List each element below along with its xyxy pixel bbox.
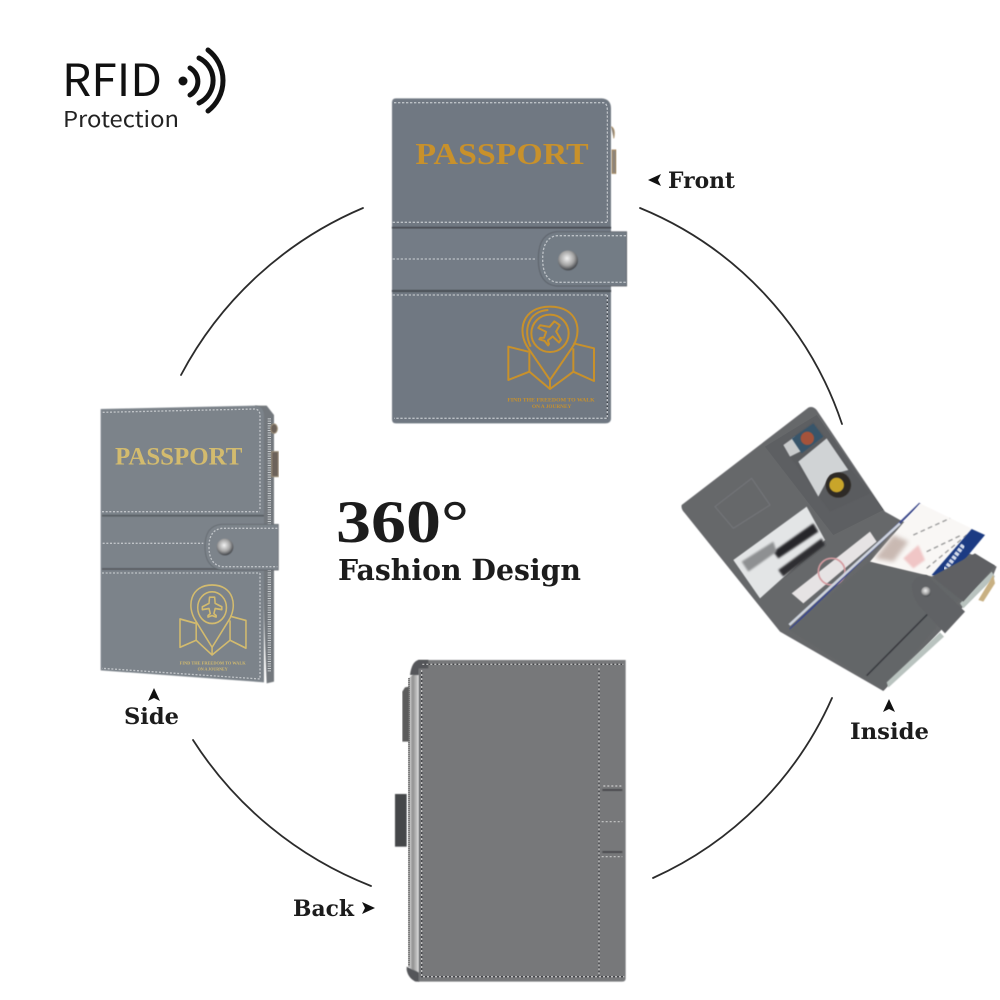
logo: RFID Protection <box>62 45 223 134</box>
strap with snap <box>538 232 627 286</box>
ID card with photo <box>782 422 870 512</box>
PASSPORT foil text: PASSPORT <box>415 137 589 171</box>
zipper pull <box>402 687 409 742</box>
emblem caption: FIND THE FREEDOM TO WALK <box>180 660 246 665</box>
emblem caption: ON A JOURNEY <box>532 405 572 410</box>
cover corners <box>407 660 428 982</box>
interior base and left page <box>681 407 997 691</box>
zipper <box>408 670 418 975</box>
wallet: inside view <box>681 407 997 691</box>
wallet: side view <box>101 406 278 683</box>
label: Back: Back <box>293 896 355 922</box>
emblem caption: ON A JOURNEY <box>198 666 228 671</box>
circular arrows <box>181 208 842 886</box>
cover <box>101 406 264 682</box>
label: Inside: Inside <box>850 719 929 745</box>
emblem caption <box>507 399 595 410</box>
arrow: Inside pointer <box>883 699 895 712</box>
Protection subheading: Protection <box>63 102 179 134</box>
emblem caption <box>180 660 246 671</box>
back cover <box>418 660 626 982</box>
right cover panel <box>789 562 963 690</box>
wallet: back view <box>395 660 626 982</box>
360 degrees: 360° <box>336 489 469 555</box>
label: Inside <box>850 699 929 745</box>
center title <box>336 489 581 587</box>
strap with snap <box>912 575 965 633</box>
icon: map pin with plane <box>180 585 246 655</box>
emblem caption: FIND THE FREEDOM TO WALK <box>507 399 595 404</box>
stitching <box>422 664 624 977</box>
boarding pass ticket <box>870 503 985 580</box>
arrow: Back pointer <box>362 902 375 914</box>
label: Front: Front <box>668 168 736 194</box>
arrow: Side pointer <box>148 688 160 701</box>
cover <box>392 98 611 423</box>
side tab <box>395 794 407 847</box>
arrow: Front pointer <box>648 174 661 186</box>
wallet: front view <box>392 98 627 423</box>
icon: map pin with plane <box>508 307 594 389</box>
RFID heading: RFID <box>62 45 162 109</box>
strap with snap <box>205 524 278 570</box>
zipper pull <box>271 424 278 477</box>
PASSPORT foil text: PASSPORT <box>115 442 242 470</box>
silver edge and zipper <box>887 553 995 688</box>
bank card in sleeve <box>733 507 825 598</box>
zipper pull <box>611 127 616 173</box>
label: Side <box>124 688 179 730</box>
document slot <box>789 503 920 629</box>
pocket slots <box>602 790 622 852</box>
zipper edge <box>255 406 274 683</box>
icon: wireless signal <box>178 50 223 111</box>
Fashion Design: Fashion Design <box>338 553 581 587</box>
label: Side: Side <box>124 704 179 730</box>
